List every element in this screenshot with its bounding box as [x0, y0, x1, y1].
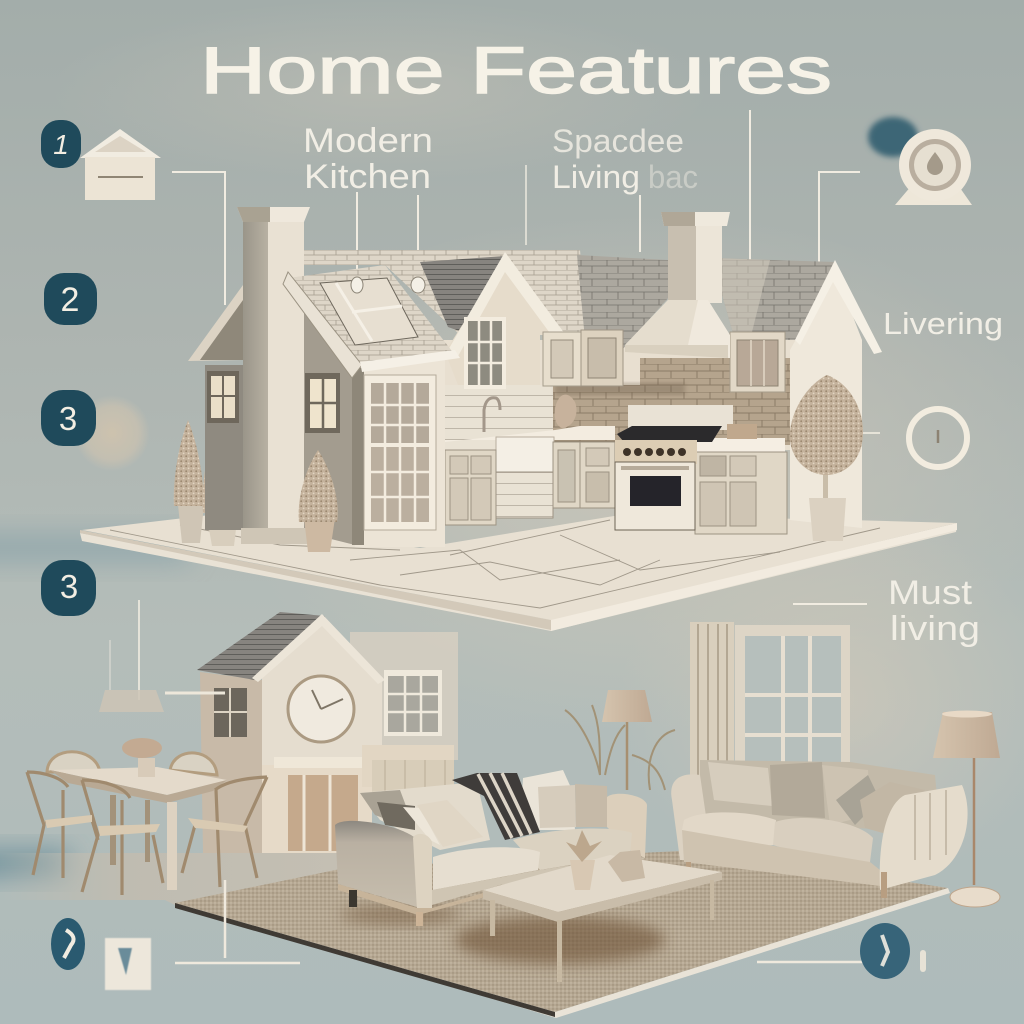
second chimney and hood — [625, 212, 730, 358]
dollhouse — [197, 612, 442, 853]
label: must living — [888, 574, 980, 648]
dining set — [27, 738, 267, 895]
living room scene — [0, 612, 1000, 1018]
left wing — [188, 285, 245, 530]
title: Home Features — [200, 33, 832, 107]
slate roofs — [420, 255, 835, 350]
throw blanket — [452, 773, 540, 840]
right topiary — [790, 375, 863, 541]
sofa back cushions — [360, 770, 575, 850]
chairs — [27, 772, 267, 895]
icon: clock ring — [909, 409, 967, 467]
right gable wall — [790, 260, 882, 528]
label: livering: Livering — [883, 306, 1003, 341]
floor — [0, 853, 345, 905]
right sofa — [671, 760, 968, 898]
bottom left badge and card — [51, 918, 151, 990]
label: spacious living: Spacdee — [552, 123, 684, 159]
label: spacious living — [552, 123, 698, 195]
counters and sink — [445, 426, 785, 472]
badge 1: 1 — [53, 129, 69, 160]
faucet and jar — [484, 395, 577, 432]
rear room haze — [350, 632, 458, 760]
kitchen house model — [80, 207, 957, 631]
back roof light — [298, 250, 588, 335]
center gable — [445, 252, 565, 389]
bottom right badge and line — [757, 923, 926, 979]
leader lines — [110, 110, 880, 700]
back chairs — [47, 752, 217, 775]
badge 1 — [41, 120, 81, 168]
front wing wall — [303, 305, 445, 547]
window and curtain — [690, 622, 850, 782]
vase and flowers — [122, 738, 162, 777]
upper cabinets — [543, 330, 785, 392]
platform — [80, 515, 957, 631]
pendant lamp — [99, 690, 225, 712]
floor lamp left and plant — [565, 690, 675, 790]
label: spacious living: Living — [552, 159, 640, 195]
badge 3 upper — [41, 390, 96, 446]
right arm — [607, 794, 647, 858]
rug — [175, 850, 950, 1018]
label: modern kitchen: Kitchen — [304, 158, 431, 196]
badge 3 lower: 3 — [60, 568, 78, 605]
coffee table — [483, 830, 722, 982]
icon: top right gauge — [868, 117, 972, 205]
label: modern kitchen: Modern — [303, 122, 433, 160]
bottom left leader — [175, 880, 300, 963]
floor lamp right — [933, 710, 1000, 907]
icon: house outline — [80, 129, 161, 200]
badge 3 lower — [41, 560, 96, 616]
label: must living: living — [890, 610, 980, 648]
badge 2: 2 — [61, 281, 79, 319]
fireplace and shelf — [262, 745, 454, 853]
seats — [433, 829, 632, 890]
range — [615, 405, 757, 530]
front topiary — [299, 450, 338, 552]
label: must living: Must — [888, 574, 973, 612]
left sofa — [335, 770, 647, 926]
table — [50, 767, 227, 890]
front gable roof — [283, 265, 460, 378]
badge 2 — [44, 273, 97, 325]
pillows — [403, 784, 608, 847]
left topiaries — [174, 410, 241, 546]
base and side panel — [335, 821, 645, 926]
chimney — [237, 207, 310, 544]
label: modern kitchen — [303, 122, 433, 196]
label: spacious living: bac — [648, 159, 698, 195]
leader dots — [351, 277, 425, 293]
badge 3 upper: 3 — [59, 400, 77, 437]
lower cabinets — [445, 442, 787, 534]
kitchen back wall — [440, 340, 800, 455]
